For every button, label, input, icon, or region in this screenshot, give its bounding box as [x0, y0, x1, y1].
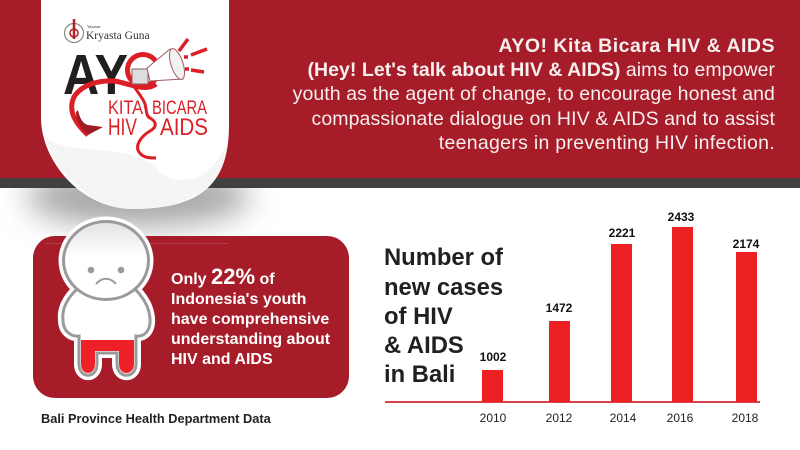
bar chart [385, 210, 760, 425]
header description: youth as the agent of change, to encourage honest and [293, 83, 775, 105]
statistic text: HIV and AIDS [171, 351, 273, 368]
header description [292, 35, 775, 154]
chart title: & AIDS [384, 332, 464, 359]
bar 2018: 2018 [732, 411, 759, 425]
megaphone [132, 39, 207, 84]
bar 2010 [480, 350, 507, 425]
BICARA: BICARA [152, 98, 207, 119]
bar 2018 [732, 237, 760, 425]
bar 2014 [609, 226, 637, 425]
bar 2016: 2433 [668, 210, 695, 224]
header description: (Hey! Let's talk about HIV & AIDS) aims to empower [307, 59, 775, 81]
sad character icon [45, 216, 228, 380]
bar 2012: 1472 [546, 301, 573, 315]
foundation name [86, 24, 150, 42]
header band [0, 0, 800, 178]
source note: Bali Province Health Department Data [41, 411, 271, 426]
KITA: KITA [108, 98, 143, 119]
AYO letters: AY [63, 43, 128, 107]
logo panel with shadow [14, 0, 262, 236]
header description: AYO! Kita Bicara HIV & AIDS [499, 35, 775, 57]
ribbon [72, 54, 158, 158]
chart title [384, 244, 503, 388]
bar 2016: 2016 [667, 411, 694, 425]
statistic text [171, 264, 330, 368]
chart title: of HIV [384, 303, 453, 330]
header description: teenagers in preventing HIV infection. [439, 132, 775, 154]
statistic card [33, 236, 349, 398]
chart title: new cases [384, 274, 503, 301]
foundation name: Yayasan [87, 24, 100, 29]
bar 2016 [667, 210, 695, 425]
bar 2012: 2012 [546, 411, 573, 425]
statistic text: Only 22% of [171, 264, 275, 289]
AIDS: AIDS [160, 114, 208, 141]
statistic text: have comprehensive [171, 311, 329, 328]
HIV: HIV [108, 114, 137, 141]
bar 2018: 2174 [733, 237, 760, 251]
bar 2014: 2014 [610, 411, 637, 425]
statistic text: understanding about [171, 331, 330, 348]
bar 2014: 2221 [609, 226, 636, 240]
bar 2010: 2010 [480, 411, 507, 425]
bar 2010: 1002 [480, 350, 507, 364]
logo: Kryasta Guna and AYO Kita Bicara HIV AIDS [63, 19, 208, 160]
bar 2012 [546, 301, 573, 425]
foundation name: Kryasta Guna [86, 30, 150, 42]
header description: compassionate dialogue on HIV & AIDS and to assist [311, 108, 775, 130]
logo emblem [64, 19, 84, 42]
chart title: Number of [384, 244, 503, 271]
statistic text: Indonesia's youth [171, 291, 306, 308]
chart title: in Bali [384, 361, 455, 388]
dark stripe [0, 178, 800, 188]
